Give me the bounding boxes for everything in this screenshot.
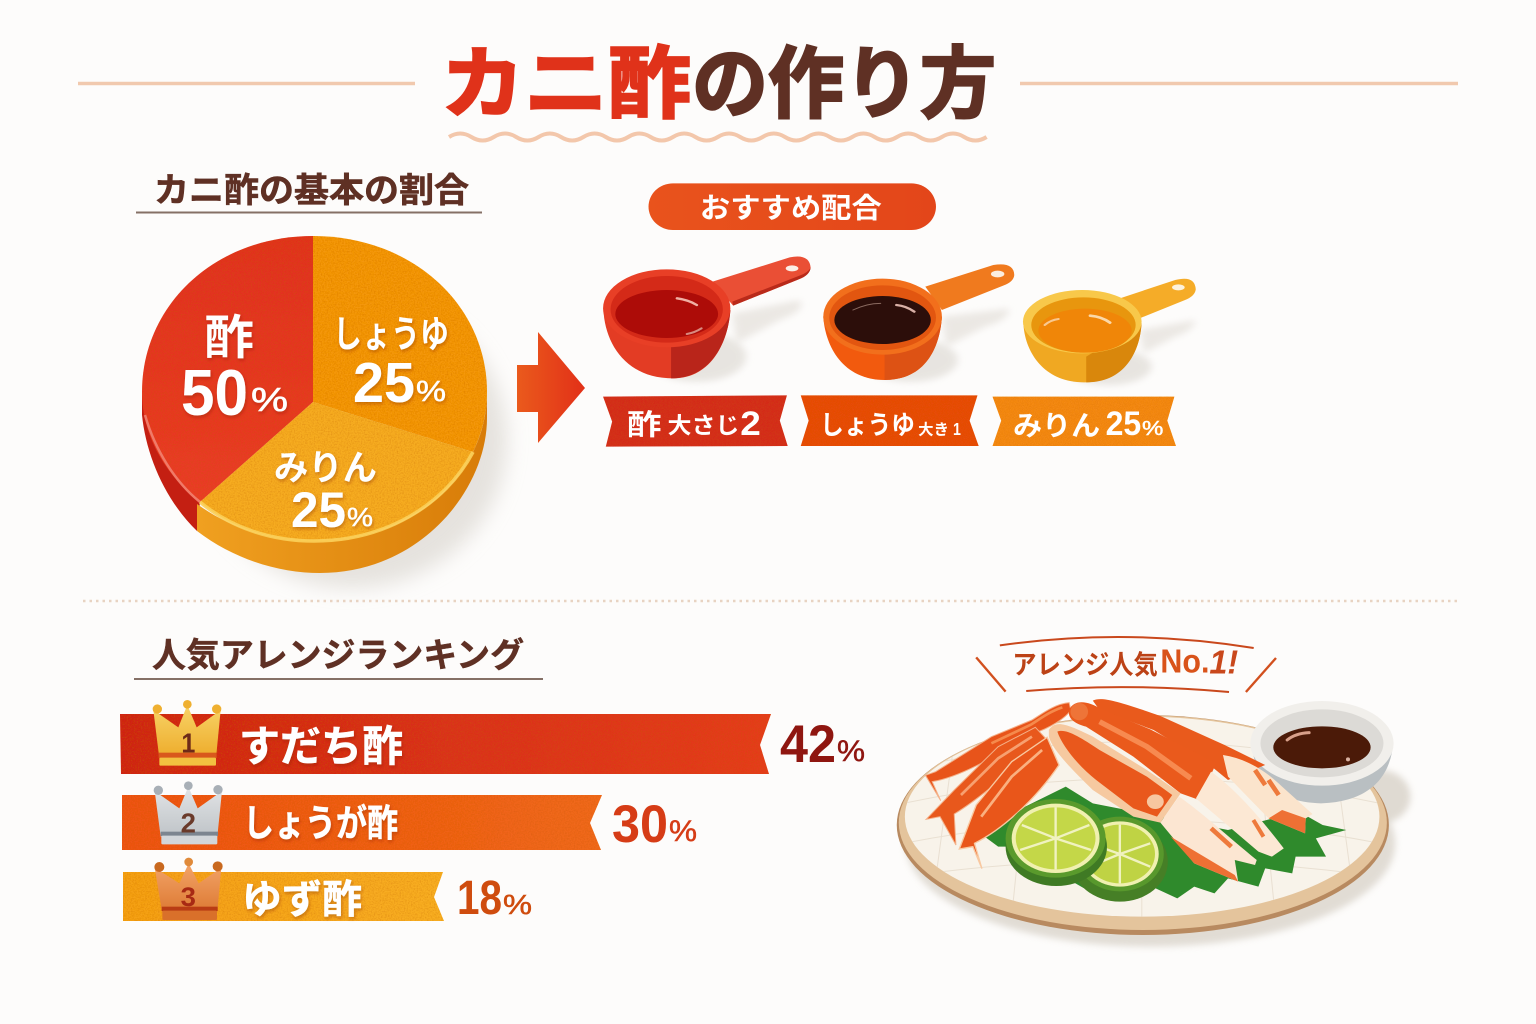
bar: rank 2: しょうが酢 [243,803,398,844]
pie side: orange [197,392,487,573]
pie slice: vinegar 50% [142,236,313,502]
pie label: vinegar [181,311,288,429]
shiso leaves [985,787,1346,898]
title: カニ酢 [441,40,691,128]
pie label: mirin [274,449,377,538]
crown: bronze: 3 [181,882,196,912]
crab leg: thin 2 [926,727,1047,845]
crab leg: large front [1049,724,1257,882]
divider [83,600,1460,602]
ribbon: vinegar 2 tbsp: 大さじ [667,413,739,439]
cup: mirin [1023,279,1196,385]
pill heading: おすすめ配合 [700,192,882,224]
bar: rank 1 [120,714,865,774]
lime slice: front [1006,799,1107,886]
bar: rank 2: 30 [612,795,668,854]
dipping bowl [1250,701,1394,803]
ribbon: soy sauce 1 tbsp: 1 [953,420,961,440]
pie label: vinegar: % [251,381,288,418]
ribbon: mirin 25%: % [1142,417,1163,440]
ribbon: vinegar 2 tbsp [603,395,788,447]
crown: gold: 1 [181,728,195,759]
pie slice: soy sauce 25% [313,236,487,452]
crown: gold [153,700,221,766]
ribbon: mirin 25%: 25 [1106,405,1141,443]
crab leg: thin 1 [925,703,1071,801]
cup: vinegar [603,256,811,382]
cup: soy sauce [823,264,1014,382]
illustration: crab plate [897,637,1411,947]
bar: rank 3: % [503,889,532,920]
ribbon: vinegar 2 tbsp: 2 [740,405,761,443]
crown: bronze [154,858,223,920]
badge: arrange No.1 [976,637,1276,692]
pie chart [142,236,507,588]
lime slice: back [1072,817,1168,902]
pie label: vinegar: 50 [181,356,248,429]
pie label: mirin: % [347,502,373,532]
pie label: soy sauce: 25 [353,351,415,415]
badge: arrange No.1: No. [1160,644,1209,681]
pie shadow [197,292,507,588]
pie side: red [142,392,200,531]
pie slice: mirin 25% [200,402,473,541]
badge: arrange No.1: アレンジ人気 [1012,650,1158,680]
plate shadow [905,740,1395,947]
heading: basic ratio: カニ酢の基本の割合 [154,172,469,210]
pie label: soy sauce [333,314,449,415]
heading: ranking: 人気アレンジランキング [152,637,524,675]
crown: silver: 2 [181,808,196,839]
ribbon: soy sauce 1 tbsp: しょうゆ [820,411,915,440]
pie label: mirin: みりん [274,449,377,488]
plate [897,715,1389,935]
ribbon: soy sauce 1 tbsp [801,395,979,446]
bar: rank 1: % [837,735,865,768]
bar: rank 1: すだち酢 [239,723,403,770]
pill heading [649,183,936,230]
bar: rank 3 [123,872,532,925]
bar: rank 2 [122,795,697,854]
bar: rank 2: % [669,815,697,848]
badge: arrange No.1: 1! [1209,645,1238,681]
ranking bars [120,700,865,925]
crab leg: thin 3 [959,737,1059,869]
crab leg: large back [1093,699,1312,833]
bar: rank 3: ゆず酢 [242,879,362,922]
pie label: vinegar: 酢 [204,311,254,364]
crab leg: large middle [1069,702,1284,857]
ribbon: vinegar 2 tbsp: 酢 [627,409,662,441]
title [78,40,1458,140]
pie label: mirin: 25 [291,482,346,538]
pie label: soy sauce: しょうゆ [333,314,449,355]
ribbon: mirin 25% [993,397,1176,446]
arrow [517,332,585,443]
pie label: soy sauce: % [416,376,446,408]
ribbon: mirin 25%: みりん [1013,411,1100,441]
title: の作り方 [692,40,996,128]
recommended mix group [603,183,1196,447]
bar: rank 3: 18 [457,872,502,925]
ribbon: soy sauce 1 tbsp: 大き [918,422,949,438]
bar: rank 1: 42 [780,715,836,774]
crown: silver [154,781,223,844]
